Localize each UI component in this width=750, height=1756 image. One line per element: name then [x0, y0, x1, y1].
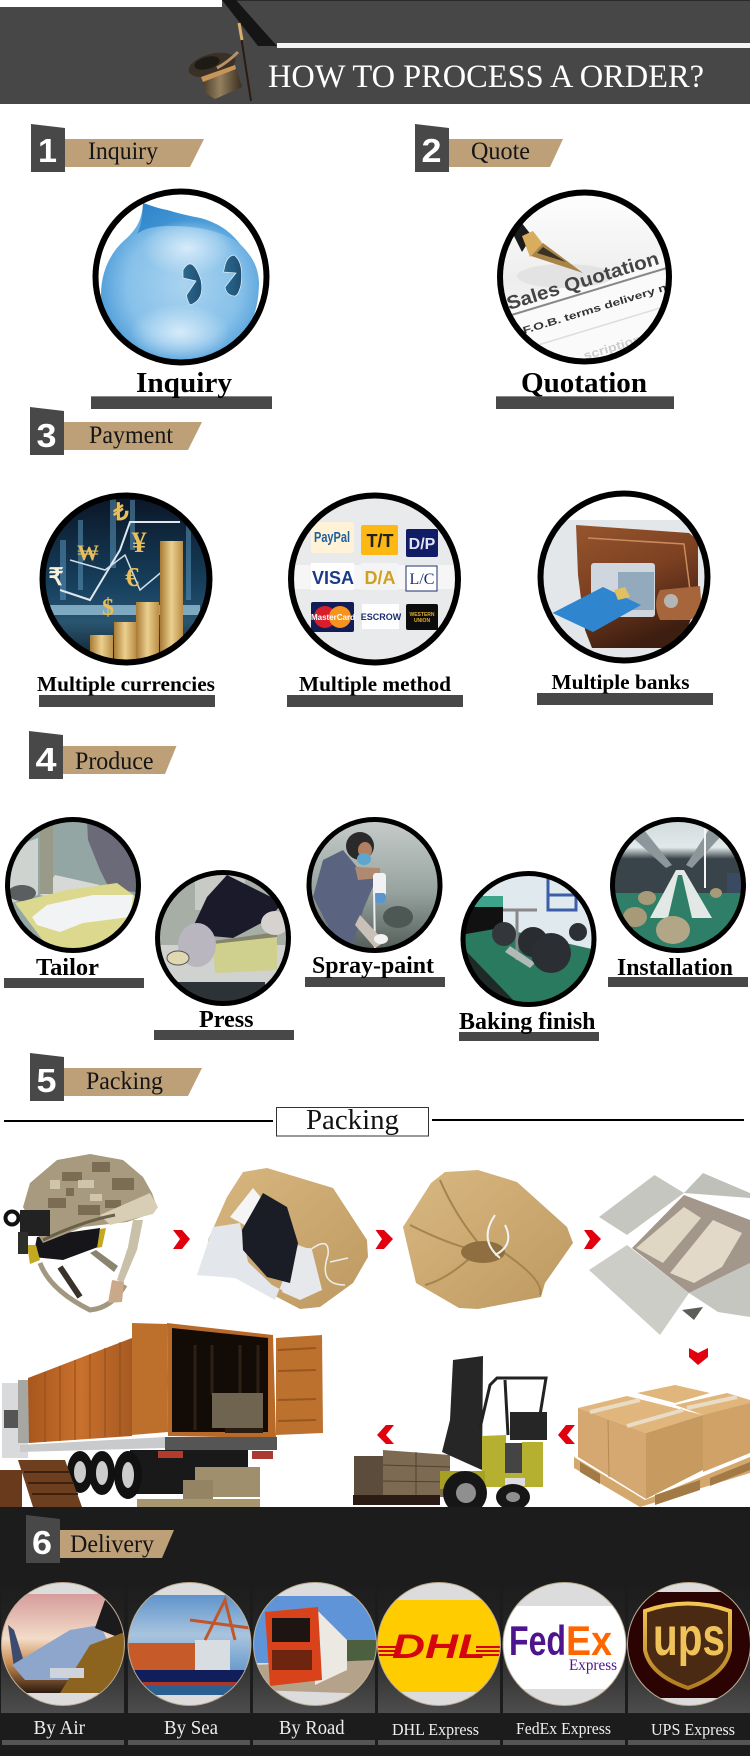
circle: multiple payment methods: [288, 493, 460, 665]
circle: press: [155, 870, 291, 1006]
photo: camouflage helmet: [6, 1154, 158, 1310]
caption: Quotation: Quotation: [521, 367, 647, 399]
photo: closed drawstring bag: [403, 1170, 573, 1309]
circle: sales quotation: Sales Quotation: [504, 249, 662, 315]
circle: sales quotation: [495, 188, 680, 370]
arrow: right: [376, 1230, 393, 1249]
card: FedEx express: Express: [569, 1657, 617, 1674]
step 1 heading: Inquiry: 1: [38, 132, 57, 169]
circle: multiple currencies: ₹: [48, 565, 64, 591]
caption: Spray-paint: Spray-paint: [312, 953, 434, 979]
circle: inquiry mascot: [90, 185, 270, 370]
circle: multiple payment methods: D/A: [364, 568, 396, 588]
caption: Inquiry: [91, 367, 272, 409]
caption: Tailor: [4, 955, 144, 988]
step 4 heading: Produce: Produce: [75, 748, 154, 775]
circle: multiple currencies: ₺: [112, 500, 129, 526]
packing divider with boxed title: Packing: [306, 1105, 399, 1136]
circle: multiple currencies: €: [125, 562, 139, 592]
step 1 heading: Inquiry: Inquiry: [88, 138, 158, 165]
circle: multiple currencies: ₩: [77, 540, 99, 565]
arrow: right: [173, 1230, 190, 1249]
circle: multiple currencies: $: [102, 595, 114, 621]
card: by road: By Road: [279, 1717, 344, 1739]
card: by air: [0, 1582, 126, 1745]
circle: spray-paint: [307, 817, 443, 953]
icon: magic hat and wand: [186, 23, 251, 101]
caption: Spray-paint: [305, 953, 445, 987]
caption: Multiple currencies: [37, 672, 215, 707]
circle: sales quotation: scription: [582, 332, 643, 363]
card: by road: [253, 1582, 377, 1745]
circle: installation: [610, 817, 746, 953]
circle: multiple payment methods: UNION: [414, 618, 430, 624]
step 3 heading: Payment: [30, 407, 202, 455]
card: by sea: [128, 1582, 252, 1745]
card: FedEx express: Fed: [509, 1617, 566, 1664]
circle: multiple payment methods: ESCROW: [361, 612, 402, 622]
photo: open carton of packed bags: [589, 1173, 750, 1335]
step 4 heading: Produce: [29, 731, 176, 779]
circle: multiple payment methods: MasterCard: [311, 613, 355, 622]
step 6 heading: Delivery: 6: [32, 1524, 52, 1561]
step 4 heading: Produce: 4: [36, 741, 57, 778]
caption: Tailor: Tailor: [36, 955, 99, 981]
arrow: left: [558, 1425, 575, 1444]
caption: Installation: Installation: [617, 955, 733, 981]
circle: multiple currencies: ¥: [132, 526, 146, 559]
card: FedEx express: FedEx Express: [516, 1719, 611, 1738]
photo: forklift with load: [353, 1356, 547, 1515]
circle: multiple payment methods: D/P: [409, 536, 436, 553]
step 2 heading: Quote: 2: [422, 132, 442, 169]
card: DHL express: DHL Express: [392, 1720, 479, 1739]
caption: Multiple method: Multiple method: [299, 672, 451, 696]
circle: multiple payment methods: PayPal: [314, 529, 350, 546]
circle: multiple payment methods: L/C: [410, 571, 434, 588]
header banner: [0, 0, 750, 104]
arrow: right: [584, 1230, 601, 1249]
caption: Multiple currencies: Multiple currencies: [37, 672, 215, 696]
packing divider with boxed title: [4, 1105, 744, 1136]
step 5 heading: Packing: Packing: [86, 1068, 163, 1095]
card: DHL express: [378, 1582, 502, 1745]
caption: Press: [154, 1007, 294, 1040]
circle: multiple currencies: [40, 493, 212, 665]
card: by air: By Air: [34, 1717, 85, 1739]
step 2 heading: Quote: Quote: [471, 138, 530, 165]
caption: Press: Press: [199, 1007, 254, 1033]
caption: Inquiry: Inquiry: [136, 367, 232, 399]
circle: sales quotation: F.O.B. terms delivery n: [522, 282, 668, 337]
arrow: left: [377, 1425, 394, 1444]
circle: baking finish: [460, 871, 596, 1007]
step 3 heading: Payment: 3: [36, 417, 56, 454]
step 6 heading: Delivery: Delivery: [70, 1531, 154, 1558]
step 5 heading: Packing: 5: [36, 1062, 56, 1099]
title: HOW TO PROCESS A ORDER?: [268, 59, 704, 95]
circle: multiple payment methods: VISA: [312, 568, 354, 588]
photo: helmet in open bag: [197, 1168, 368, 1309]
card: UPS express: UPS Express: [651, 1720, 735, 1739]
caption: Multiple banks: Multiple banks: [552, 670, 690, 694]
circle: tailor: [5, 817, 141, 953]
step 1 heading: Inquiry: [31, 124, 204, 172]
card: FedEx express: [503, 1582, 627, 1745]
section: delivery panel: [0, 1507, 750, 1756]
caption: Quotation: [496, 367, 674, 409]
caption: Multiple method: [287, 672, 463, 707]
card: FedEx express: Ex: [566, 1617, 613, 1664]
card: UPS express: ups: [653, 1607, 725, 1667]
photo: container truck with cargo: [0, 1323, 323, 1507]
photo: stacked cartons on pallet: [574, 1385, 750, 1507]
caption: Installation: [608, 955, 748, 987]
step 6 heading: Delivery: [26, 1515, 174, 1563]
step 2 heading: Quote: [415, 124, 563, 172]
step 3 heading: Payment: Payment: [89, 422, 173, 449]
circle: multiple banks wallet: [538, 491, 710, 665]
arrow: down: [689, 1348, 708, 1365]
caption: Multiple banks: [537, 670, 713, 705]
card: UPS express: [627, 1582, 750, 1745]
circle: multiple payment methods: T/T: [366, 531, 394, 551]
circle: multiple payment methods: WESTERN: [410, 612, 435, 618]
step 5 heading: Packing: [30, 1053, 202, 1101]
caption: Baking finish: Baking finish: [459, 1009, 596, 1035]
card: by sea: By Sea: [164, 1717, 218, 1739]
card: DHL express: DHL: [392, 1628, 486, 1666]
